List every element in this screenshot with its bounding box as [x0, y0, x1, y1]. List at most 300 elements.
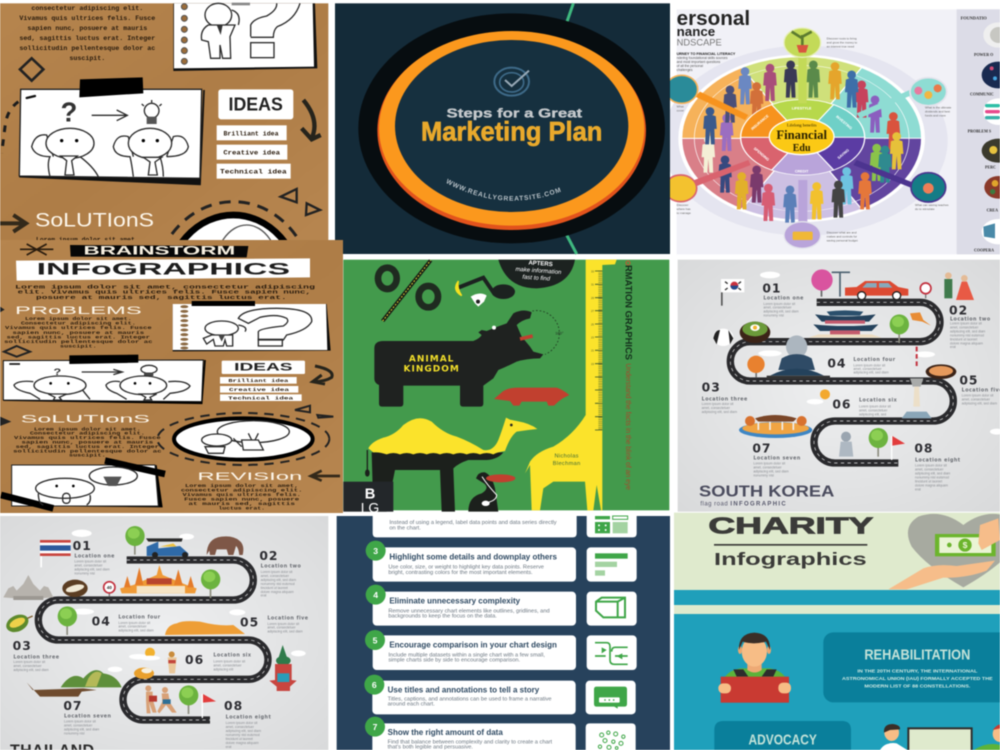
callout captions: to manage	[677, 211, 691, 215]
tip 7 card: Find that balance between complexity and clarity to create a chart	[388, 739, 553, 745]
icon: traditional dancer	[168, 651, 177, 673]
ideas list	[220, 361, 305, 401]
arrow head stub	[0, 307, 5, 312]
location labels: 02	[259, 549, 278, 563]
tip 4 card: backgrounds to keep the focus on the data.	[388, 613, 497, 619]
ideas list: Technical idea	[220, 168, 287, 176]
location descriptions: amet, consectetuer	[13, 664, 43, 668]
location labels: 01	[73, 539, 92, 553]
sector labels: SPENDING	[753, 147, 770, 162]
location descriptions: adipiscing elit, sed diam	[950, 329, 986, 333]
percent symbol	[378, 259, 438, 322]
icon: island temple	[739, 415, 812, 438]
advocacy box	[714, 721, 851, 750]
icon: green tree	[890, 314, 909, 343]
giraffe: 23	[591, 335, 595, 339]
tip 5 icon: arrows	[587, 635, 637, 670]
sector labels: CREDIT	[795, 170, 809, 174]
curved arrow	[302, 100, 321, 139]
location descriptions: tincidunt ut laoreet	[950, 337, 977, 341]
location labels: 04	[827, 356, 846, 370]
location descriptions: dolore magna aliquam	[226, 741, 259, 745]
middle ring sectors	[741, 100, 865, 175]
ideas list: Brilliant idea	[224, 129, 279, 137]
pelican	[468, 472, 515, 512]
tip 4 card: Eliminate unnecessary complexity	[389, 596, 521, 605]
title block: ndering foundational skills sources	[677, 56, 728, 60]
icon: green tree	[125, 526, 145, 555]
callout captions: funds and more	[925, 113, 946, 117]
tip 5 card: simple charts side by side to encourage comparison.	[388, 658, 520, 664]
location labels: 03	[13, 639, 32, 653]
panel: brown brainstorm page (top)	[0, 2, 330, 244]
icon: tree	[179, 685, 198, 714]
sector labels: LIFESTYLE	[792, 106, 812, 110]
icon: tree	[869, 428, 888, 457]
icon: coconut dish	[62, 580, 88, 597]
idea sketch card	[19, 77, 204, 184]
location descriptions: tincidunt ut laoreet	[261, 586, 288, 590]
callout captions: do to stimulate	[915, 207, 935, 211]
giraffe: 27	[591, 309, 595, 313]
location descriptions: adipiscing elit, sed diam	[763, 310, 799, 314]
location descriptions: Lorem ipsum dolor sit	[702, 402, 734, 406]
website url: WWW.REALLYGREATSITE.COM	[446, 178, 562, 202]
tip 7 card: Show the right amount of data	[388, 728, 503, 737]
location descriptions: adipiscing elit, sed diam	[226, 729, 261, 733]
tip 2 card	[373, 516, 577, 537]
ideas list: Creative idea	[223, 149, 280, 157]
infographics banner: INFoGRAPHICS	[37, 259, 290, 278]
dashed arc	[2, 102, 18, 153]
location descriptions: tincidunt ut laoreet	[915, 479, 942, 483]
panel: thailand road infographic: Location two	[261, 564, 301, 570]
location descriptions: adipiscing elit, sed diam	[915, 471, 951, 475]
icon: temple guardian	[269, 645, 297, 691]
location descriptions: nonummy nisl euismod	[915, 475, 949, 479]
idea sketch card: ?	[53, 368, 62, 378]
intro paragraph	[15, 285, 315, 301]
BIG publisher logo: B	[365, 486, 375, 502]
icon: green tree	[201, 569, 220, 598]
callout: lower left rose	[665, 160, 751, 202]
sector labels: INSURANCE	[750, 114, 770, 131]
hippo: 180°	[555, 330, 564, 335]
people illustrations	[702, 60, 903, 223]
panel: south korea road infographic: Location six	[859, 398, 898, 404]
location labels	[13, 539, 278, 713]
icon: korean flag	[721, 279, 744, 306]
foundations column: COMMUNIC	[970, 91, 994, 96]
center: financial edu	[769, 119, 834, 155]
tip 5 card: Include multiple datasets within a single chart with a few small,	[388, 653, 545, 659]
panel: chart design tips	[336, 514, 671, 750]
icon: grey temple	[3, 575, 53, 600]
giraffe	[525, 260, 617, 510]
icon: target check	[494, 68, 529, 96]
panel: thailand road infographic: Location six	[213, 653, 252, 659]
location descriptions: Lorem ipsum dolor sit	[859, 405, 891, 409]
location descriptions	[13, 560, 303, 749]
title block: ersonal	[677, 7, 750, 30]
icon: finish flag	[202, 694, 216, 718]
giraffe: 21	[591, 349, 595, 353]
location descriptions: nonummy nisl euismod	[226, 733, 260, 737]
location descriptions: adipiscing elit, sed diam	[261, 578, 296, 582]
location descriptions: amet, consectetuer	[261, 574, 290, 578]
icon: finish flag	[891, 436, 905, 460]
location descriptions: adipiscing elit, sed diam	[753, 469, 789, 473]
problems text: Consectetur adipiscing elit.	[21, 322, 136, 327]
solutions text: Lorem ipsum dolor sit amet.	[34, 427, 141, 432]
star doodle	[20, 244, 53, 255]
location descriptions: erat	[915, 487, 921, 491]
sector labels	[750, 106, 853, 174]
location descriptions: nonummy nisl	[64, 731, 85, 735]
location descriptions: adipiscing elit, sed diam	[13, 668, 49, 672]
tip 6 card: 6	[372, 680, 377, 690]
location labels: 05	[240, 616, 259, 630]
location descriptions: adipiscing elit, sed	[859, 413, 886, 417]
giraffe: 19	[591, 362, 595, 366]
panel: thailand road infographic: Location five	[267, 616, 309, 622]
camel	[365, 418, 537, 512]
problems text: sollicitudin pellentesque dolor ac	[4, 340, 153, 345]
spine title: Understand the facts in the blink of an eye	[624, 363, 631, 490]
panel: south korea road infographic: Location one	[763, 296, 804, 302]
tip 2 card: Instead of using a legend, label data points and data series directly	[389, 520, 557, 526]
solutions text	[13, 427, 162, 459]
sector labels: INVESTING	[835, 115, 853, 131]
location descriptions: Lorem ipsum dolor sit	[950, 321, 982, 325]
location descriptions: amet, consectetuer	[950, 325, 979, 329]
location descriptions: nonummy nisl euismod	[950, 333, 984, 337]
foundations column: COOPERA	[974, 248, 994, 253]
location labels: 08	[914, 442, 933, 456]
location descriptions: amet, consectetuer	[859, 409, 888, 413]
diamond doodle	[4, 346, 30, 357]
location descriptions: Lorem ipsum dolor sit	[118, 621, 150, 625]
triangle doodles	[281, 189, 320, 215]
location descriptions: adipiscing elit, sed diam	[962, 402, 997, 406]
panel: south korea road infographic: Location two	[950, 316, 991, 322]
location descriptions: dolore magna aliquam	[915, 483, 948, 487]
location descriptions: nonummy nisl euismod	[261, 582, 295, 586]
wheel rim	[662, 46, 948, 236]
title block: nance	[677, 24, 715, 39]
location descriptions: adipiscing elit, sed diam	[267, 629, 303, 633]
icon: hanbok couple	[944, 272, 974, 300]
location descriptions: nonummy nisl	[753, 473, 774, 477]
intro text: sapien nunc, posuere at mauris	[27, 24, 147, 32]
spine title	[623, 261, 633, 490]
location descriptions: Lorem ipsum dolor sit	[753, 461, 785, 465]
title: south korea	[699, 484, 834, 508]
spine title: RMATION GRAPHICS	[623, 265, 633, 360]
intro paragraph: Lorem ipsum dolor sit amet, consectetur adipiscing	[15, 285, 315, 291]
icon: red car	[845, 281, 908, 300]
icon: elephant	[207, 536, 243, 555]
location descriptions: Lorem ipsum dolor sit	[64, 719, 96, 723]
location descriptions: Lorem ipsum dolor sit	[853, 363, 885, 367]
ideas list: Brilliant idea	[228, 378, 289, 384]
location descriptions: Lorem ipsum dolor sit	[267, 622, 299, 626]
tip 6 card: Use titles and annotations to tell a story	[388, 686, 540, 695]
subtitle: Steps for a Great	[447, 105, 583, 120]
tip 4 card: 4	[373, 590, 378, 600]
problems text: Vivamus quis ultrices felis. Fusce	[5, 326, 152, 331]
revision sketch card	[1, 461, 165, 508]
location descriptions: adipiscing elit, sed diam	[853, 371, 889, 375]
hippo: KINGDOM	[404, 364, 460, 374]
location descriptions: Lorem ipsum dolor sit	[261, 570, 293, 574]
icon: orange tree	[747, 356, 765, 378]
title	[708, 512, 873, 569]
location labels: 03	[702, 381, 721, 395]
giraffe: 25	[591, 322, 595, 326]
speech bubble: chapters: make information	[515, 267, 562, 276]
intro text: suscipit.	[69, 54, 105, 62]
location descriptions: adipiscing elit, sed diam	[118, 628, 154, 632]
icon: pink tree and lamp	[811, 269, 850, 297]
revision text: at mauris sed, sagittis	[188, 502, 296, 507]
tip 3 card: bright, contrasting colors for the most important elements.	[388, 570, 533, 576]
intro paragraph: posuere at mauris sed, sagittis luctus erat.	[36, 295, 287, 301]
callout captions: where has	[677, 207, 691, 211]
tip 4 card	[366, 585, 576, 626]
callout captions: makes and controls for	[827, 234, 857, 238]
icon: orange leaf	[820, 389, 830, 399]
location descriptions: amet, consectetuer	[267, 626, 297, 630]
tip 3 card: Highlight some details and downplay others	[389, 552, 557, 561]
location descriptions: dolore magna aliquam	[950, 341, 983, 345]
speech bubble: chapters: fast to find	[522, 275, 551, 283]
location descriptions: amet, consectetuer	[226, 725, 255, 729]
author: Blechman	[553, 461, 581, 467]
brainstorm banner: BRAINSTORM	[84, 244, 235, 258]
teal content panel	[674, 614, 1000, 750]
notebook card with question mark	[173, 3, 317, 71]
title block: of all the personal	[677, 64, 703, 68]
icon: muay thai boxers	[145, 685, 177, 713]
location descriptions: Lorem ipsum dolor sit	[763, 302, 795, 306]
panel: south korea road infographic: Location seven	[753, 455, 801, 461]
icon: bibimbap	[740, 322, 770, 343]
solutions text: sed, sagittis luctus erat. Integer	[16, 445, 160, 450]
title: south korea: SOUTH KOREA	[699, 484, 834, 501]
callout: upper right coins	[857, 78, 947, 118]
callout captions: What can saving teaches	[915, 203, 949, 207]
location descriptions: Lorem ipsum dolor sit	[213, 660, 245, 664]
location descriptions: Lorem ipsum dolor sit	[13, 660, 45, 664]
callout captions: saving personal budget	[827, 238, 858, 242]
callout captions: dividends and best	[925, 109, 950, 113]
title block: challenges	[677, 68, 693, 72]
tip 3 card: Use color, size, or weight to highlight key data points. Reserve	[388, 565, 544, 571]
panel: personal finance landscape	[669, 7, 1000, 255]
tip 5 card	[365, 630, 576, 670]
icon: green tree	[58, 606, 77, 635]
foundations column: CREA	[987, 207, 998, 212]
tip 4 icon: box	[587, 592, 637, 626]
solutions text: suscipit.	[69, 454, 106, 459]
callout captions: Discover what are and	[827, 230, 857, 234]
callout: top plant	[784, 28, 821, 103]
location descriptions: Lorem ipsum dolor sit	[226, 721, 258, 725]
speech bubble: chapters	[498, 260, 575, 288]
rehabilitation box: REHABILITATION	[864, 646, 970, 663]
rehabilitation box: IN THE 20TH CENTURY, THE INTERNATIONAL	[857, 668, 978, 673]
panel: south korea road infographic: Location four	[853, 357, 896, 363]
sector labels: SAVING	[837, 148, 850, 160]
tip 6 card: around each chart.	[388, 702, 435, 708]
author: Nicholas	[554, 453, 579, 459]
intro text: consectetur adipiscing elit.	[31, 4, 143, 12]
BIG publisher logo: I G	[361, 499, 379, 515]
title block: and most important questions	[677, 60, 721, 64]
brainstorm banner	[70, 244, 248, 258]
icon: heart with money and hands: $	[963, 540, 968, 550]
people with board	[880, 724, 1000, 750]
infographics banner	[16, 258, 310, 281]
location labels: 04	[92, 614, 111, 628]
outer wheel sectors	[679, 55, 924, 222]
title: south korea: flag road INFOGRAPHIC	[700, 502, 787, 508]
icon: food basket	[134, 668, 154, 679]
foundations column: PERC	[985, 165, 996, 170]
location descriptions: adipiscing elit, sed diam	[64, 727, 100, 731]
callout captions: What is the ultimate	[925, 105, 952, 109]
callout captions	[677, 36, 952, 242]
author	[553, 453, 581, 467]
tip 2 card: on the chart.	[389, 525, 421, 531]
icon: orange skewers	[910, 312, 931, 326]
location descriptions: amet, consectetuer	[118, 625, 148, 629]
title block: URNEY TO FINANCIAL LITERACY	[677, 52, 736, 56]
location descriptions: adipiscing elit, sed diam	[74, 568, 110, 572]
tip 5 card: 5	[373, 635, 378, 645]
icon: seoul tower	[902, 347, 932, 418]
icon: durian	[3, 611, 33, 636]
clouds	[72, 530, 306, 672]
intro text: sollicitudin pellentesque dolor ac	[19, 44, 155, 52]
foundations column	[961, 15, 1000, 253]
panel: south korea road infographic	[677, 259, 1000, 512]
center: financial edu: Lifelong benefits	[787, 123, 817, 128]
icon: temple	[120, 565, 197, 593]
callout captions: What	[677, 104, 684, 108]
icon: road sign	[920, 283, 931, 298]
location labels: 08	[224, 699, 243, 713]
revision text: Fusce sapien nunc, posuere	[184, 497, 300, 502]
panel: brown brainstorm page (main)	[0, 239, 344, 514]
giraffe: 33	[591, 269, 595, 273]
solutions text: Vivamus quis ultrices felis. Fusce	[14, 436, 161, 441]
intro text	[19, 4, 155, 62]
tip 7 icon: scatter	[586, 723, 636, 750]
location labels: 07	[63, 699, 82, 713]
green connector lines	[567, 3, 577, 254]
title: Marketing Plan	[421, 117, 602, 147]
hippo: ANIMAL	[409, 355, 454, 365]
panel: south korea road infographic: Location eight	[915, 457, 961, 463]
location descriptions: erat	[261, 594, 266, 598]
BIG publisher logo	[343, 482, 393, 515]
problems text: sed, sagittis luctus erat. Integer	[7, 336, 151, 341]
location descriptions: Lorem ipsum dolor sit	[74, 560, 106, 564]
callout: bottom credit	[784, 180, 821, 248]
location descriptions: erat	[950, 345, 956, 349]
speech bubble: chapters: APTERS	[528, 260, 553, 268]
icon: thai flag	[40, 540, 71, 567]
triangle doodles	[295, 406, 333, 418]
location descriptions: amet, consectetuer	[213, 664, 243, 668]
tip 6 icon: message	[586, 681, 636, 714]
winding road	[38, 560, 268, 720]
location descriptions: Lorem ipsum dolor sit	[962, 394, 994, 398]
location descriptions: amet, consectetuer	[64, 723, 93, 727]
winding road	[730, 302, 953, 463]
ideas list: Technical idea	[228, 395, 293, 401]
location labels: 06	[185, 653, 204, 667]
foundations column: PROBLEM S	[968, 128, 992, 133]
diamond doodle	[20, 58, 43, 81]
solutions text: Lorem ipsum dolor sit amet.	[36, 237, 139, 244]
icon: sun	[140, 648, 160, 660]
revision text: Vivamus quis ultrices felis.	[182, 493, 301, 498]
panel: south korea road infographic: Location three	[702, 396, 748, 402]
tip 5 card: Encourage comparison in your chart design	[389, 641, 557, 650]
intro text: Vivamus quis ultrices felis. Fusce	[19, 14, 155, 22]
rehabilitation box: ASTRONOMICAL UNION (IAU) FORMALLY ACCEPTED THE	[842, 676, 993, 681]
curved arrow	[313, 366, 332, 384]
ideas list	[217, 89, 293, 179]
ideas list: IDEAS	[228, 94, 283, 115]
callout: lower right savings	[853, 160, 946, 202]
callout captions: an interest true need	[827, 44, 855, 48]
tip 4 card: Remove unnecessary chart elements like outlines, gridlines, and	[388, 609, 550, 615]
panel: charity infographics	[673, 512, 1000, 750]
location descriptions: Lorem ipsum dolor sit	[915, 463, 947, 467]
location descriptions: tincidunt ut laoreet	[226, 737, 253, 741]
giraffe: 29	[591, 296, 595, 300]
solutions text: Consectetur adipiscing elit.	[30, 432, 145, 437]
revision text: Lorem ipsum dolor sit amet,	[185, 484, 298, 489]
location descriptions	[702, 302, 997, 491]
icon: reclining buddha	[165, 621, 245, 635]
icon: rice ball	[713, 329, 733, 346]
panel: thailand road infographic: Location one	[74, 553, 115, 559]
revision text: luctus erat.	[218, 506, 265, 511]
ideas list: Creative idea	[229, 387, 289, 393]
light bulb circle	[157, 413, 329, 465]
location labels: 02	[949, 303, 968, 317]
tip 6 card	[364, 675, 576, 714]
pig	[494, 388, 569, 406]
icon: speed sign	[104, 582, 115, 597]
panel: marketing plan badge	[334, 2, 671, 256]
light bulb circle	[153, 202, 313, 382]
arrow to revision	[311, 471, 340, 481]
location descriptions: amet, consectetuer	[853, 367, 883, 371]
panel: thailand road infographic: Location four	[118, 615, 161, 621]
location labels: 05	[959, 373, 978, 387]
foundations column: FOUNDATIO	[961, 15, 987, 20]
callout captions: and grow the money to	[827, 40, 858, 44]
location descriptions: amet, consectetuer	[915, 467, 944, 471]
location labels: 07	[752, 441, 771, 455]
revision text	[181, 484, 302, 511]
